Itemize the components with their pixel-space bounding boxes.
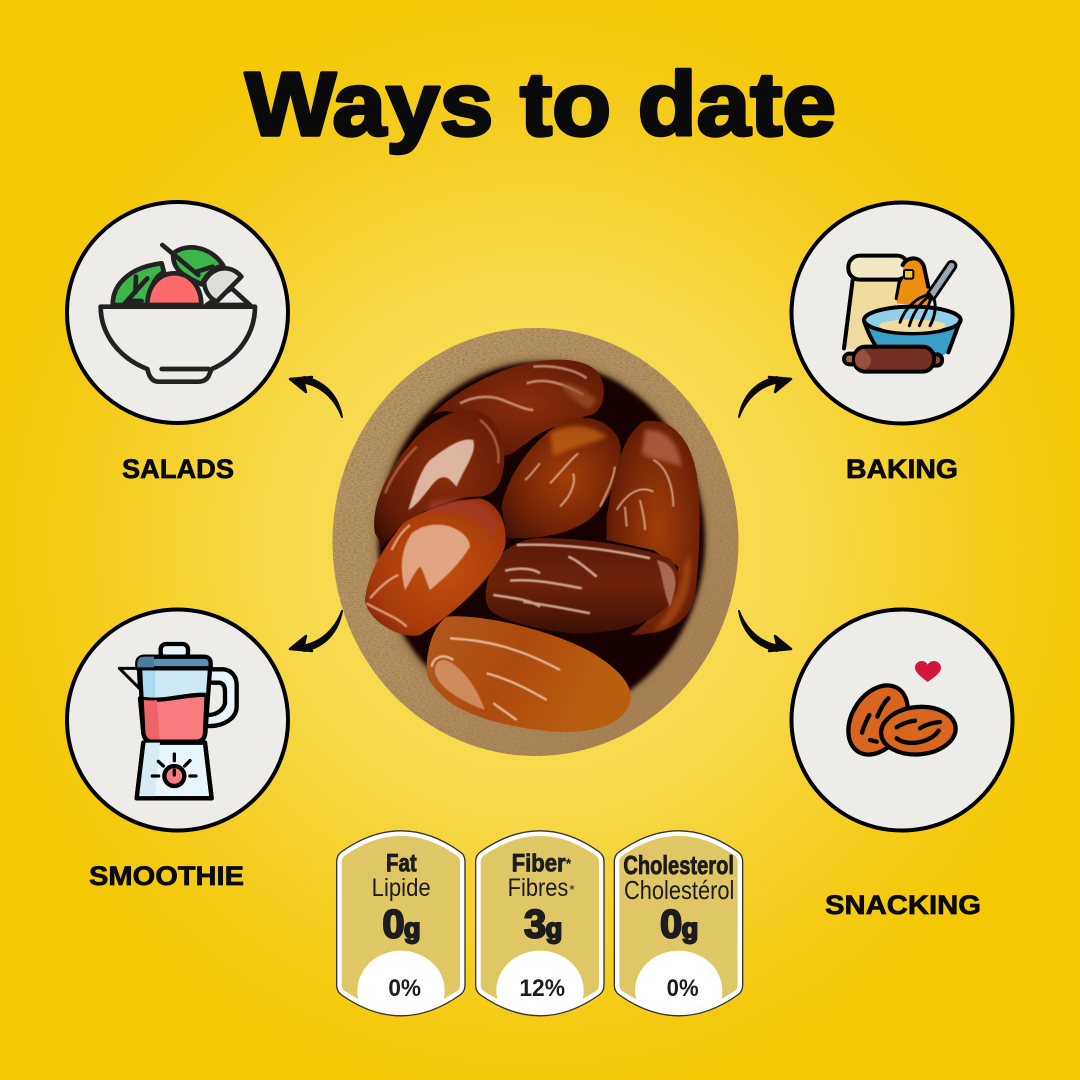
badge: fiber: *	[569, 882, 575, 897]
badge: cholesterol: Cholesterol	[623, 850, 734, 880]
date: left	[374, 410, 504, 547]
badge: fat: Fat	[386, 850, 417, 878]
label: salads: SALADS	[122, 454, 234, 484]
badge: fat	[337, 831, 465, 1031]
label: smoothie: SMOOTHIE	[89, 861, 244, 891]
date: middle horizontal	[486, 538, 678, 633]
date: right	[607, 421, 700, 635]
icon: baking bowl and rolling pin	[844, 256, 961, 372]
date: front left	[365, 498, 506, 636]
date: top	[432, 360, 604, 456]
panel: baking	[792, 202, 1012, 424]
arrow: to baking	[739, 377, 791, 417]
icon: salad circle	[67, 202, 288, 423]
badge: fiber: 12%	[519, 975, 565, 1002]
badge: fiber: *	[566, 857, 572, 873]
badge: fat: 0%	[388, 975, 421, 1002]
badge: fat: Lipide	[372, 874, 431, 902]
label: snacking: SNACKING	[825, 890, 981, 920]
icon: salad bowl	[101, 245, 255, 382]
arrow: to salads	[290, 377, 342, 417]
badge: fiber	[476, 831, 604, 1031]
icon: dates and heart	[836, 661, 958, 765]
badge: fiber: Fiber	[512, 850, 566, 878]
arrow: to smoothie	[290, 611, 342, 651]
badge: fiber: Fibres	[508, 874, 568, 902]
badge: fat: 0g	[382, 902, 421, 946]
panel: snacking	[792, 610, 1012, 830]
badge: cholesterol: Cholestérol	[624, 875, 734, 905]
icon: blender	[119, 644, 237, 798]
badge: cholesterol: 0g	[660, 902, 698, 946]
badge: fiber: 3g	[524, 902, 562, 946]
badge: cholesterol: 0%	[667, 975, 699, 1002]
panel: salads	[67, 202, 288, 423]
panel: nutrition badges	[337, 831, 743, 1031]
arrow: to snacking	[739, 611, 791, 651]
photo: wooden bowl of dates	[332, 328, 738, 756]
date: centre	[502, 418, 621, 538]
date: bottom	[427, 616, 631, 732]
icon: baking circle	[792, 202, 1012, 424]
title: Ways to date	[245, 55, 836, 155]
label: baking: BAKING	[846, 454, 958, 484]
icon: smoothie circle	[67, 610, 288, 830]
badge: cholesterol	[614, 831, 743, 1031]
icon: snacking circle	[792, 610, 1012, 830]
panel: smoothie	[67, 610, 288, 830]
